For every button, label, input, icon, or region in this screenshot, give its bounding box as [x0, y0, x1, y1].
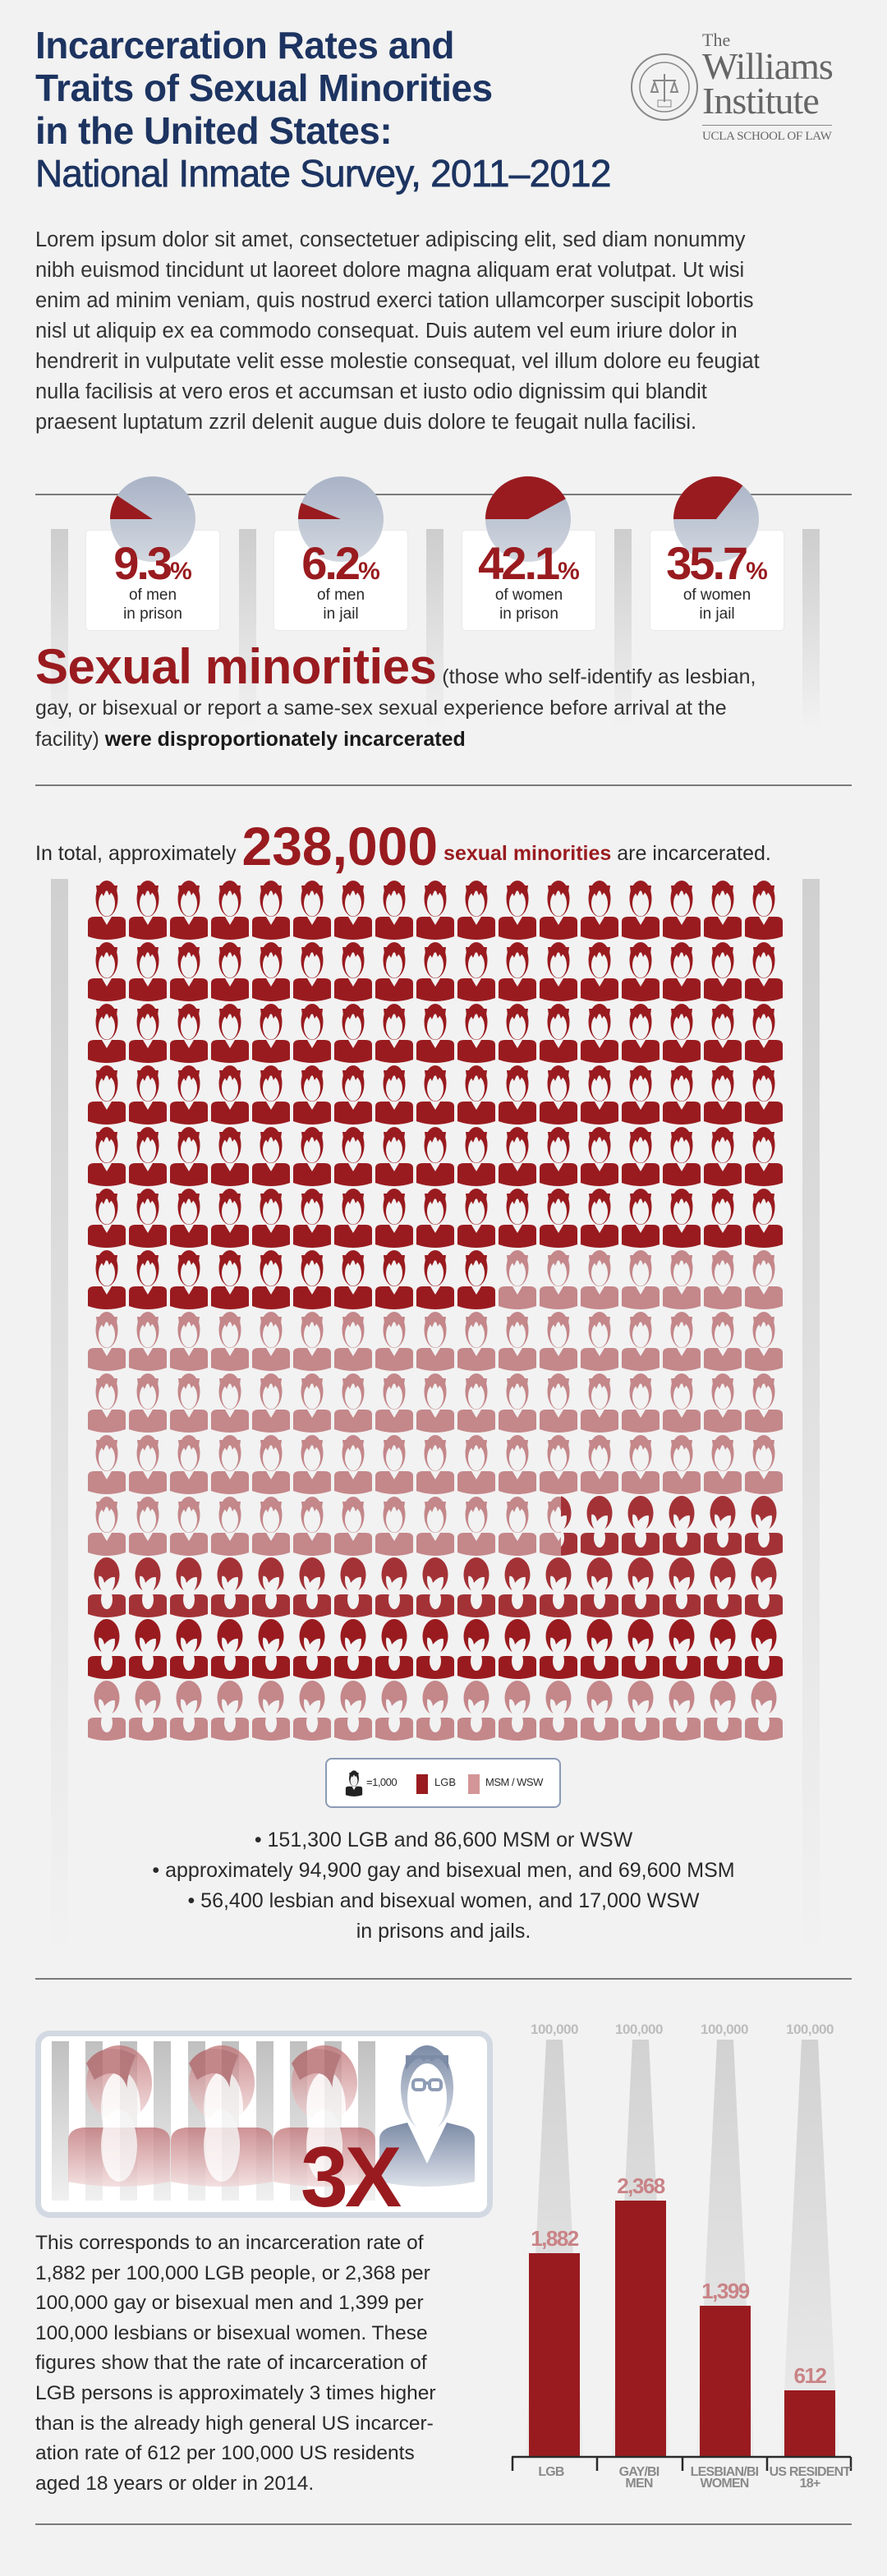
scale labels: 100,000 [615, 2022, 663, 2037]
stat: 35.7% women jail [666, 537, 768, 623]
stat: 9.3% men prison [113, 537, 192, 623]
category labels: 18+ [800, 2477, 820, 2491]
rate paragraph: aged 18 years or older in 2014. [35, 2472, 314, 2495]
rate paragraph: 100,000 lesbians or bisexual women. These [35, 2322, 428, 2344]
scale labels: 100,000 [786, 2022, 834, 2037]
panel: 3X illustration [35, 2031, 493, 2218]
pie: 35.7% [673, 476, 759, 562]
category labels: MEN [625, 2477, 653, 2491]
cell bars [52, 2041, 375, 2201]
intro paragraph: praesent luptatum zzril delenit augue duis dolore te feugait nulla facilisi. [35, 411, 696, 434]
rate paragraph: 100,000 gay or bisexual men and 1,399 per [35, 2292, 424, 2314]
intro paragraph: nulla facilisis at vero eros et accumsan et iusto odio dignissim qui blandit [35, 380, 707, 403]
scale labels: 100,000 [701, 2022, 748, 2037]
stat: 35.7% women jail: 35.7% [666, 537, 768, 589]
values: 1,399 [701, 2279, 750, 2303]
title: Incarceration Rates and [35, 24, 454, 67]
stat: 42.1% women prison: in prison [499, 605, 558, 623]
bullet list [152, 1828, 735, 1943]
bars [529, 2201, 835, 2456]
category labels: LGB [538, 2465, 564, 2479]
stat: 9.3% men prison: of men [129, 586, 177, 604]
title: in the United States: [35, 109, 392, 152]
stat: 6.2% men jail: 6.2% [301, 537, 380, 589]
scale labels [531, 2022, 834, 2037]
grid side bars [51, 879, 68, 1963]
heading: sexual minorities: gay, or bisexual or report a same-sex sexual experience before arrival at the [35, 697, 727, 720]
icon grid: 238 people [88, 881, 783, 1741]
axis [512, 2457, 851, 2471]
logo text: Williams [702, 45, 833, 87]
logo text: The [702, 30, 730, 50]
rate paragraph: 1,882 per 100,000 LGB people, or 2,368 per [35, 2262, 430, 2284]
stat: 9.3% men prison: in prison [123, 605, 182, 623]
bullet list: • 56,400 lesbian and bisexual women, and 17,000 WSW [187, 1889, 700, 1912]
values [531, 2174, 826, 2388]
scale labels: 100,000 [531, 2022, 578, 2037]
total headline: In total, approximately 238,000 sexual minorities are incarcerated. [35, 816, 771, 876]
rate paragraph [35, 2232, 435, 2495]
bullet list: • 151,300 LGB and 86,600 MSM or WSW [255, 1828, 632, 1852]
legend: MSM / WSW [485, 1776, 543, 1788]
rate paragraph: than is the already high general US incarcer- [35, 2413, 434, 2435]
category labels: WOMEN [700, 2477, 749, 2491]
intro paragraph: nisl ut aliquip ex ea commodo consequat. Duis autem vel eum iriure dolor in [35, 320, 738, 343]
pie: 6.2% [298, 476, 384, 562]
stat: 35.7% women jail: in jail [699, 605, 735, 623]
stat: 6.2% men jail: of men [317, 586, 365, 604]
intro paragraph: hendrerit in vulputate velit esse molestie consequat, vel illum dolore eu feugiat [35, 350, 760, 373]
intro paragraph: Lorem ipsum dolor sit amet, consectetuer adipiscing elit, sed diam nonummy [35, 228, 746, 251]
stat: 35.7% women jail: of women [683, 586, 751, 604]
legend [325, 1758, 561, 1808]
logo: Williams Institute [631, 30, 833, 143]
rate paragraph: This corresponds to an incarceration rate of [35, 2232, 424, 2254]
rate paragraph: ation rate of 612 per 100,000 US residents [35, 2442, 415, 2464]
stat: 42.1% women prison: of women [495, 586, 563, 604]
heading: sexual minorities: facility) were disproportionately incarcerated [35, 728, 466, 751]
logo text [702, 30, 833, 143]
icon: three women [68, 2045, 375, 2187]
logo text: UCLA SCHOOL OF LAW [702, 130, 831, 143]
bullet list: in prisons and jails. [356, 1920, 531, 1943]
intro paragraph: nibh euismod tincidunt ut laoreet dolore magna aliquam erat volutpat. Ut wisi [35, 259, 744, 282]
beams [526, 2040, 839, 2456]
panel: stats [51, 529, 820, 687]
stat: 42.1% women prison: 42.1% [478, 537, 580, 589]
rate paragraph: LGB persons is approximately 3 times higher [35, 2382, 435, 2404]
stat: 42.1% women prison [478, 537, 580, 623]
icon: seal [631, 53, 698, 121]
pie: 9.3% [110, 476, 195, 562]
stat: 9.3% men prison: 9.3% [113, 537, 192, 589]
category labels: US RESIDENT [770, 2465, 851, 2479]
legend: =1,000 [366, 1776, 397, 1788]
title [35, 24, 611, 195]
heading: sexual minorities [35, 639, 756, 751]
legend: LGB [434, 1776, 456, 1788]
stat: 6.2% men jail [301, 537, 380, 623]
bar chart: incarceration rates [511, 2022, 853, 2491]
values: 2,368 [617, 2174, 665, 2198]
icon: man with glasses [379, 2045, 475, 2187]
intro paragraph [35, 228, 760, 434]
heading: sexual minorities: Sexual minorities (those who self-identify as lesbian, [35, 639, 756, 694]
bullet list: • approximately 94,900 gay and bisexual men, and 69,600 MSM [152, 1859, 735, 1882]
pie charts [110, 476, 759, 562]
values: 612 [794, 2363, 826, 2388]
stat: 6.2% men jail: in jail [323, 605, 359, 623]
icon: legend person [345, 1770, 363, 1796]
category labels: LESBIAN/BI [691, 2465, 759, 2479]
intro paragraph: enim ad minim veniam, quis nostrud exerci tation ullamcorper suscipit lobortis [35, 289, 753, 312]
title: Traits of Sexual Minorities [35, 67, 493, 109]
rate paragraph: figures show that the rate of incarceration of [35, 2352, 427, 2374]
category labels: GAY/BI [619, 2465, 660, 2479]
logo text: Institute [702, 80, 819, 122]
category labels [538, 2465, 851, 2491]
values: 1,882 [531, 2226, 579, 2251]
pie: 42.1% [485, 476, 571, 562]
title: National Inmate Survey, 2011–2012 [35, 152, 611, 195]
